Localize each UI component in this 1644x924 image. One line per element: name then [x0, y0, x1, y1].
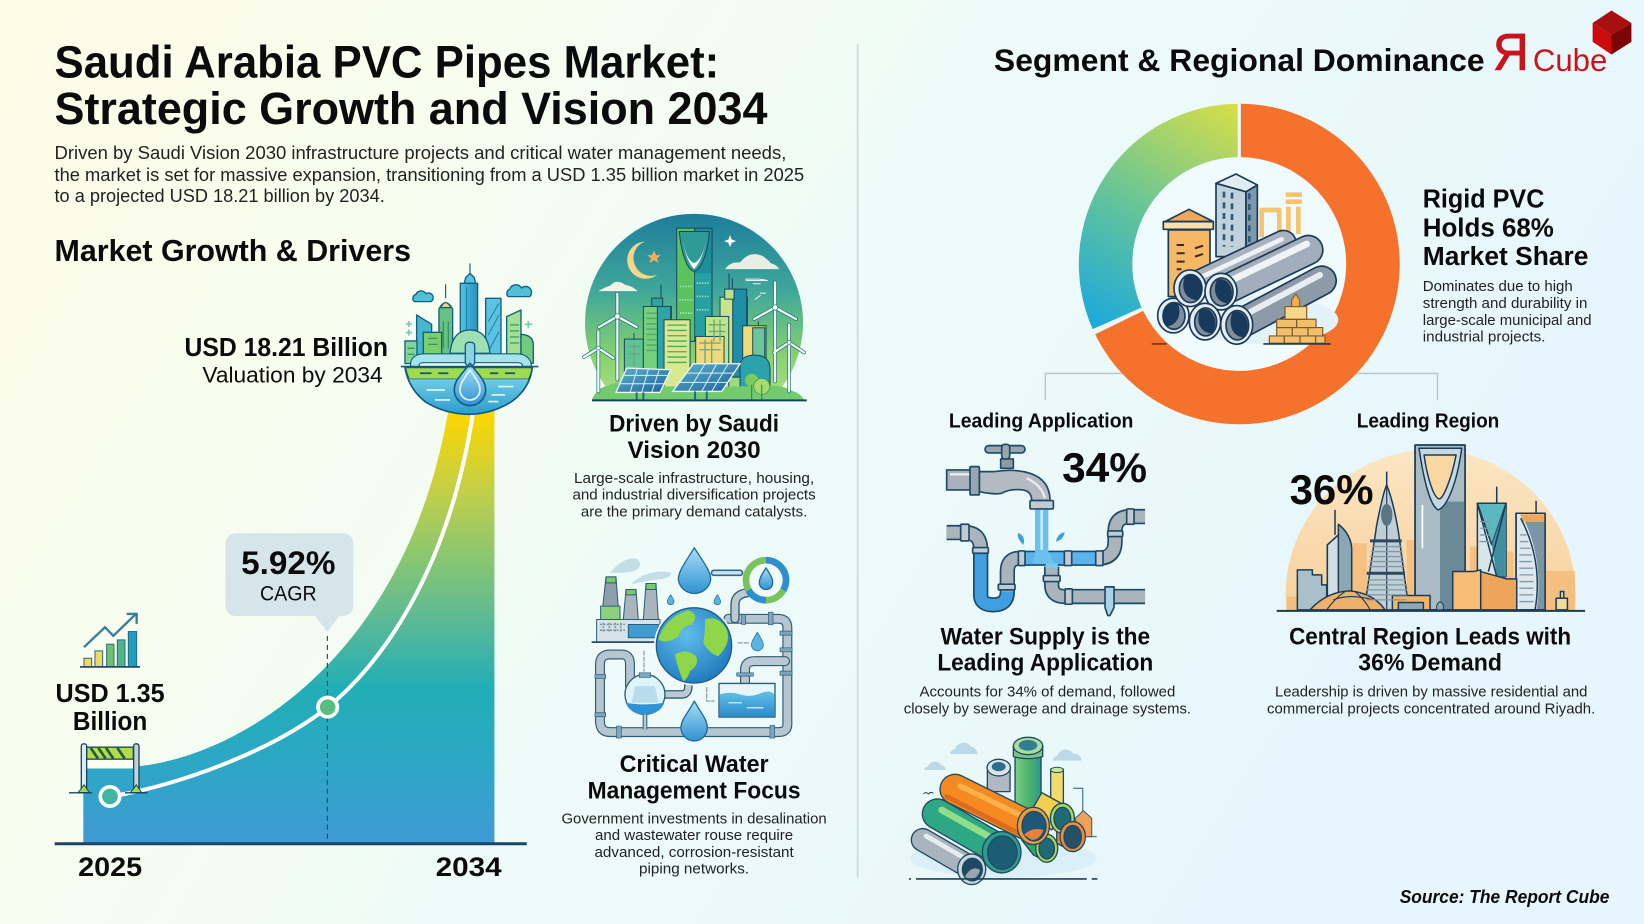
axis label 2034: 2034: [436, 851, 502, 882]
text: Rigid PVC 68%: Rigid PVC: [1423, 185, 1544, 213]
dashed marker: [326, 636, 329, 843]
text: Critical Water Management Focus: Management Focus: [588, 777, 801, 804]
icon: pipes and buildings: [1152, 174, 1338, 344]
text: Critical Water Management Focus: Government investments in desalination: [561, 810, 827, 827]
text: water supply: Accounts for 34% of demand, followed: [920, 684, 1175, 701]
mid point: [318, 698, 337, 717]
text: Critical Water Management Focus: Critical Water: [620, 751, 769, 778]
text: Rigid PVC 68%: industrial projects.: [1423, 329, 1545, 346]
intro paragraph: Driven by Saudi Vision 2030 infrastructure projects and critical water management needs,: [55, 142, 786, 163]
icon: Riyadh skyline: [1276, 444, 1586, 612]
text: Rigid PVC 68%: Holds 68%: [1423, 215, 1554, 243]
text: Critical Water Management Focus: and wastewater rouse require: [595, 827, 793, 844]
icon: water management: [592, 548, 792, 741]
icon: Saudi Vision city: [582, 214, 807, 402]
axis label 2025: 2025: [78, 851, 142, 882]
chart: growth curve: [55, 410, 527, 882]
donut centre: [1132, 157, 1346, 371]
text: Driven by Saudi Vision 2030: are the primary demand catalysts.: [581, 503, 807, 520]
donut chart: [1079, 104, 1400, 424]
text: Driven by Saudi Vision 2030: Large-scale infrastructure, housing,: [574, 470, 814, 487]
text: Rigid PVC 68%: large-scale municipal and: [1423, 312, 1592, 329]
text: central region: 36% Demand: [1358, 649, 1502, 676]
label: USD 1.35 Billion: [56, 678, 165, 736]
heading: market growth: Market Growth & Drivers: [55, 234, 411, 268]
icon: start barrier: [69, 744, 148, 793]
label: USD 1.35 Billion: Billion: [73, 706, 147, 736]
icon: small bar chart: [80, 614, 140, 667]
title: Saudi Arabia PVC Pipes Market:: [55, 37, 719, 88]
text: Critical Water Management Focus: advanced, corrosion-resistant: [594, 844, 794, 861]
text: Rigid PVC 68%: strength and durability in: [1423, 295, 1587, 312]
label: leading region: Leading Region: [1357, 410, 1499, 432]
title: [55, 37, 767, 134]
column divider: [857, 44, 859, 878]
logo: RCube: Я: [1493, 24, 1529, 82]
callout: CAGR: 5.92%: [241, 545, 336, 581]
start point: [100, 787, 120, 806]
text: water supply: [904, 623, 1191, 717]
text: Driven by Saudi Vision 2030: Vision 2030: [628, 437, 761, 464]
label: USD 1.35 Billion: USD 1.35: [56, 678, 165, 708]
text: Driven by Saudi Vision 2030: Driven by Saudi: [609, 411, 779, 438]
growth line: [110, 410, 473, 796]
text: Driven by Saudi Vision 2030: and industrial diversification projects: [572, 487, 816, 504]
value: 34%: 34%: [1062, 444, 1147, 491]
text: water supply: Water Supply is the: [940, 623, 1150, 650]
icon: faucet and pipes: [947, 444, 1145, 616]
text: central region: commercial projects concentrated around Riyadh.: [1267, 700, 1595, 717]
text: Critical Water Management Focus: [561, 751, 827, 878]
chart area: [83, 410, 494, 843]
text: central region: [1267, 623, 1595, 717]
text: Rigid PVC 68%: Dominates due to high: [1423, 278, 1573, 295]
label: leading application: Leading Application: [949, 410, 1133, 432]
intro paragraph: the market is set for massive expansion, transitioning from a USD 1.35 billion market in 2025: [55, 164, 804, 185]
intro paragraph: [55, 142, 804, 206]
text: Rigid PVC 68%: Market Share: [1423, 243, 1588, 271]
text: water supply: Leading Application: [937, 649, 1153, 676]
text: central region: Central Region Leads with: [1289, 623, 1571, 650]
text: central region: Leadership is driven by massive residential and: [1275, 684, 1587, 701]
chart plot: [55, 410, 527, 844]
label: USD 18.21 Billion: USD 18.21 Billion: [185, 332, 388, 362]
text: Critical Water Management Focus: piping networks.: [639, 861, 749, 878]
logo: RCube: Cube: [1533, 43, 1607, 78]
connector lines: [1045, 373, 1437, 400]
label: USD 18.21 Billion: Valuation by 2034: [202, 362, 383, 387]
label: USD 18.21 Billion: [185, 332, 388, 387]
segment: rigid PVC 68%: [1095, 104, 1400, 424]
callout: CAGR: CAGR: [260, 582, 317, 605]
value: 36%: 36%: [1290, 466, 1373, 513]
source credit: Source: The Report Cube: [1400, 886, 1609, 907]
text: Rigid PVC 68%: [1423, 185, 1592, 346]
text: Driven by Saudi Vision 2030: [572, 411, 816, 520]
text: water supply: closely by sewerage and drainage systems.: [904, 700, 1191, 717]
segment: other 32%: [1079, 104, 1238, 329]
icon: city and water bowl: [401, 263, 538, 414]
baseline axis: [55, 839, 527, 848]
logo: RCube: [1493, 10, 1631, 82]
title: Strategic Growth and Vision 2034: [55, 83, 767, 134]
heading: segment and regional dominance: Segment & Regional Dominance: [994, 43, 1485, 78]
callout: CAGR: [225, 533, 353, 632]
intro paragraph: to a projected USD 18.21 billion by 2034.: [55, 185, 385, 206]
icon: coloured pipe stack: [909, 737, 1097, 885]
